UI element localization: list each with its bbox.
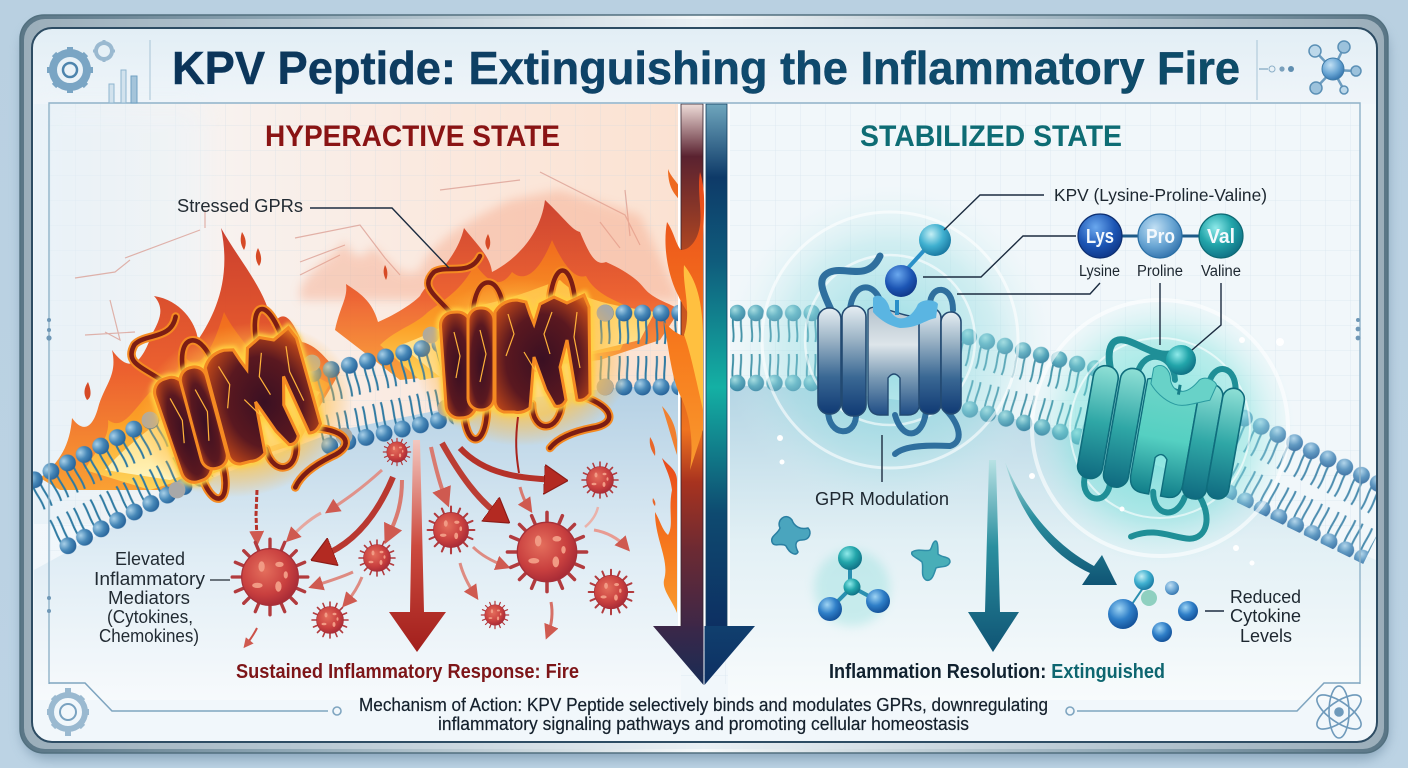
stabilized heading: STABILIZED STATE [860,120,1122,153]
mediators label: Mediators [108,588,190,608]
reduced cytokine label: Levels [1240,626,1292,646]
faint crack lines [75,172,640,340]
flame over bar [664,172,704,470]
inflammatory mediators [232,438,633,638]
membrane left segments [22,304,681,558]
flames: left receptor [40,228,340,490]
mechanism of action text: Mechanism of Action: KPV Peptide selectively binds and modulates GPRs, downregulating [359,695,1048,715]
divider side flames [650,169,678,613]
right background [728,104,1376,684]
burning receptor: left [127,304,352,503]
header divider lines [49,103,1360,684]
mediators label [94,549,230,646]
amino acid chain: Proline [1137,263,1183,280]
icon: gears and bars [47,40,137,103]
grid [49,104,1360,684]
icon: molecule network [1259,41,1361,94]
central divider arrow [653,104,755,685]
reduced cytokine spheres [1108,570,1198,642]
amino acid chain: Valine [1201,263,1241,280]
mediators label: (Cytokines, [107,607,193,627]
amino acid chain: Pro [1146,226,1175,248]
mediators label: Inflammatory [94,569,205,589]
reduced cytokine label: Cytokine [1230,606,1301,626]
stressed GPRs label: Stressed GPRs [177,196,303,216]
title: KPV Peptide: Extinguishing the Inflammatory Fire [172,42,1240,94]
right intracellular zone [728,385,1376,700]
teal bound ligand [1166,345,1196,375]
small embers [84,232,490,400]
header vertical rules [150,40,1257,100]
mediators label: Elevated [115,549,185,569]
stressed GPRs label [177,196,449,268]
KPV ligand [885,224,951,315]
left background [34,104,681,524]
icon: atom [1312,686,1366,738]
molecule glow [814,550,890,626]
sustained response caption: Sustained Inflammatory Response: Fire [236,661,579,683]
main illustration area [22,104,1402,700]
amino acid chain: Lys [1086,226,1114,248]
mediators label: Chemokines) [99,626,199,646]
amino acid chain: Val [1207,226,1235,248]
mechanism of action text [359,695,1048,734]
mechanism of action text: inflammatory signaling pathways and promoting cellular homeostasis [438,714,969,734]
bottom bracket lines [49,683,1360,715]
resolution caption: Inflammation Resolution: Extinguished [829,661,1165,683]
receptor glow rings [725,185,1295,566]
burning receptor: right [414,256,630,448]
reduced cytokine label [1230,587,1301,646]
blue receptor with KPV [818,224,961,454]
KPV label: KPV (Lysine-Proline-Valine) [1054,185,1267,205]
icon: bottom gear [47,688,89,736]
flames: right receptor [335,200,680,385]
hyperactive heading: HYPERACTIVE STATE [265,120,560,153]
membrane right segments [728,304,1402,564]
GPR modulation label: GPR Modulation [815,489,949,509]
main red arrow [389,440,446,652]
small molecules [772,517,950,580]
background faint flames [300,190,680,300]
Y molecule [818,546,890,621]
left white edge fade [50,150,51,450]
reduced cytokine label: Reduced [1230,587,1301,607]
KPV callouts [882,195,1224,611]
teal receptor with KPV [1076,336,1246,542]
left intracellular zone [34,385,681,700]
amino acid chain [1078,214,1243,280]
resolution arrows [968,460,1117,652]
binding pocket [873,296,938,328]
side ticks [46,318,1360,613]
inflammatory arrows [246,417,626,645]
amino acid chain: Lysine [1079,263,1120,280]
